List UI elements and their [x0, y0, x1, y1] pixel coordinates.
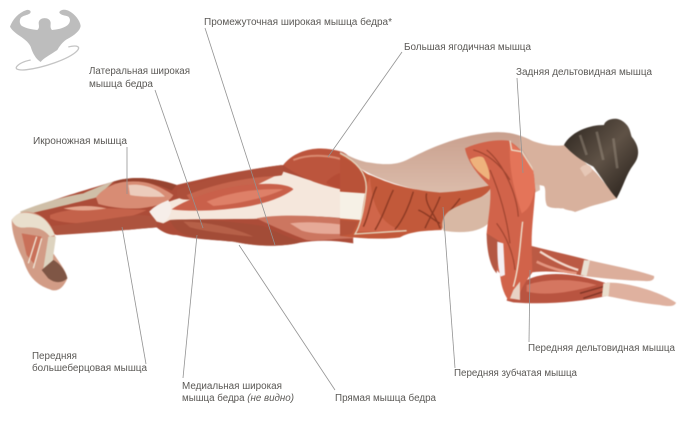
label: medial vastus: Медиальная широкая: [182, 381, 282, 392]
foot: [12, 212, 67, 290]
label: tibialis anterior: [32, 351, 147, 374]
leg base: [12, 150, 353, 246]
hair: [564, 119, 638, 198]
illustration: plank figure: [12, 119, 676, 306]
glute: [283, 148, 360, 193]
group: leg and foot: [12, 148, 360, 290]
label: medial vastus: мышца бедра (не видно): [182, 392, 294, 404]
abdominal muscle: [340, 153, 492, 239]
label: posterior deltoid: Задняя дельтовидная мышца: [516, 67, 652, 78]
label: medial vastus: [182, 381, 294, 404]
knee and thigh white band: [149, 172, 353, 223]
lower hand: [607, 283, 676, 306]
label: intermediate vastus: Промежуточная широкая мышца бедра*: [204, 16, 392, 28]
knee cap: [149, 200, 171, 222]
upper forearm: [527, 246, 588, 276]
label: serratus anterior: Передняя зубчатая мышца: [454, 367, 577, 379]
label: tibialis anterior: Передняя: [32, 351, 77, 362]
hip white and glute lower: [340, 157, 366, 193]
icon: bodybuilder logo: [10, 10, 81, 70]
label: rectus femoris: Прямая мышца бедра: [335, 392, 436, 404]
leader lines: [122, 28, 530, 390]
label: tibialis anterior: большеберцовая мышца: [32, 362, 147, 374]
label: lateral vastus: мышца бедра: [89, 78, 153, 90]
shin tendon: [20, 182, 113, 215]
upper hand: [583, 260, 654, 281]
lower forearm: [507, 274, 607, 303]
lower vastus: [170, 220, 303, 246]
peroneal: [50, 215, 157, 234]
label: lateral vastus: Латеральная широкая: [89, 66, 190, 77]
back skin: [340, 132, 540, 217]
group: torso, arms and head: [340, 119, 676, 306]
shoulder and upper arm: [465, 140, 535, 300]
right quad: [257, 216, 353, 240]
top thigh muscle: [177, 165, 283, 200]
tibialis: [50, 208, 147, 223]
label: gastrocnemius: Икроножная мышца: [33, 136, 127, 147]
label: anterior deltoid: Передняя дельтовидная мышца: [528, 343, 675, 354]
label: lateral vastus: [89, 66, 190, 90]
calf: [96, 180, 173, 209]
belly skin: [442, 193, 492, 232]
biceps femoris: [172, 184, 293, 211]
neck and face: [520, 136, 617, 212]
label: gluteus maximus: Большая ягодичная мышца: [404, 42, 531, 53]
